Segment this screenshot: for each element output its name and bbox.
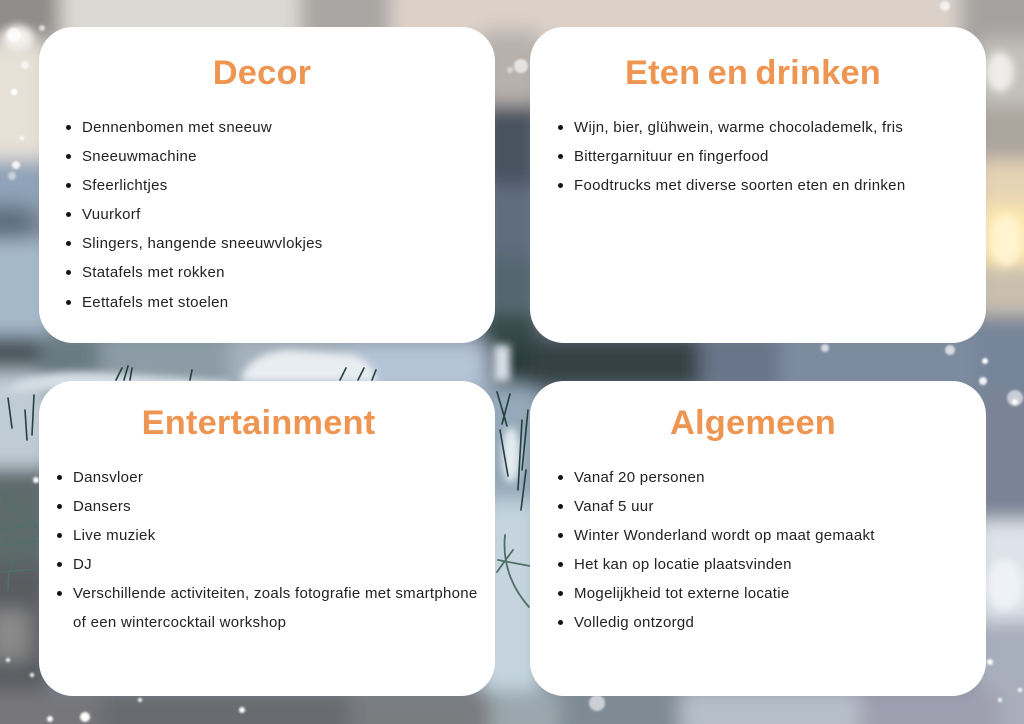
list: Entertainment items: Live muziek [73, 527, 156, 544]
list: Algemeen items: Volledig ontzorgd [574, 614, 694, 631]
list: Decor items: Vuurkorf [82, 206, 141, 223]
panel: Entertainment [39, 381, 495, 696]
list: Algemeen items [558, 469, 875, 631]
list: Eten en drinken items: Foodtrucks met diverse soorten eten en drinken [574, 177, 905, 194]
panel: Eten en drinken [530, 27, 986, 343]
top [0, 0, 60, 40]
list: Entertainment items [57, 469, 478, 631]
list: Entertainment items: Dansvloer [73, 469, 143, 486]
heading: Algemeen: Algemeen [670, 404, 836, 442]
panel: Algemeen [530, 381, 986, 696]
right [975, 40, 1024, 110]
heading: Decor: Decor [213, 54, 311, 92]
bottom [0, 690, 100, 724]
snow on branches [240, 350, 378, 382]
list: Eten en drinken items [558, 119, 905, 194]
list: Algemeen items: Vanaf 20 personen [574, 469, 705, 486]
list: Decor items: Sfeerlichtjes [82, 177, 168, 194]
list: Algemeen items: Vanaf 5 uur [574, 498, 654, 515]
list: Algemeen items: Winter Wonderland wordt op maat gemaakt [574, 527, 875, 544]
list: Entertainment items: of een wintercocktail workshop [73, 614, 286, 631]
list: Decor items: Statafels met rokken [82, 264, 225, 281]
list: Decor items [66, 119, 323, 311]
heading: Entertainment: Entertainment [142, 404, 375, 442]
list: Entertainment items: DJ [73, 556, 92, 573]
list: Eten en drinken items: Wijn, bier, glühwein, warme chocolademelk, fris [574, 119, 903, 136]
list: Decor items: Sneeuwmachine [82, 148, 197, 165]
list: Decor items: Dennenbomen met sneeuw [82, 119, 272, 136]
list: Eten en drinken items: Bittergarnituur en fingerfood [574, 148, 769, 165]
middle band [40, 335, 100, 390]
list: Algemeen items: Het kan op locatie plaatsvinden [574, 556, 792, 573]
panel: Decor [39, 27, 495, 343]
centre [480, 30, 540, 105]
list: Algemeen items: Mogelijkheid tot externe locatie [574, 585, 790, 602]
heading: Eten en drinken: Eten en drinken [625, 54, 881, 92]
left [0, 40, 50, 160]
list: Entertainment items: Verschillende activiteiten, zoals fotografie met smartphone [73, 585, 478, 602]
list: Decor items: Slingers, hangende sneeuwvlokjes [82, 235, 323, 252]
list: Decor items: Eettafels met stoelen [82, 294, 228, 311]
list: Entertainment items: Dansers [73, 498, 131, 515]
